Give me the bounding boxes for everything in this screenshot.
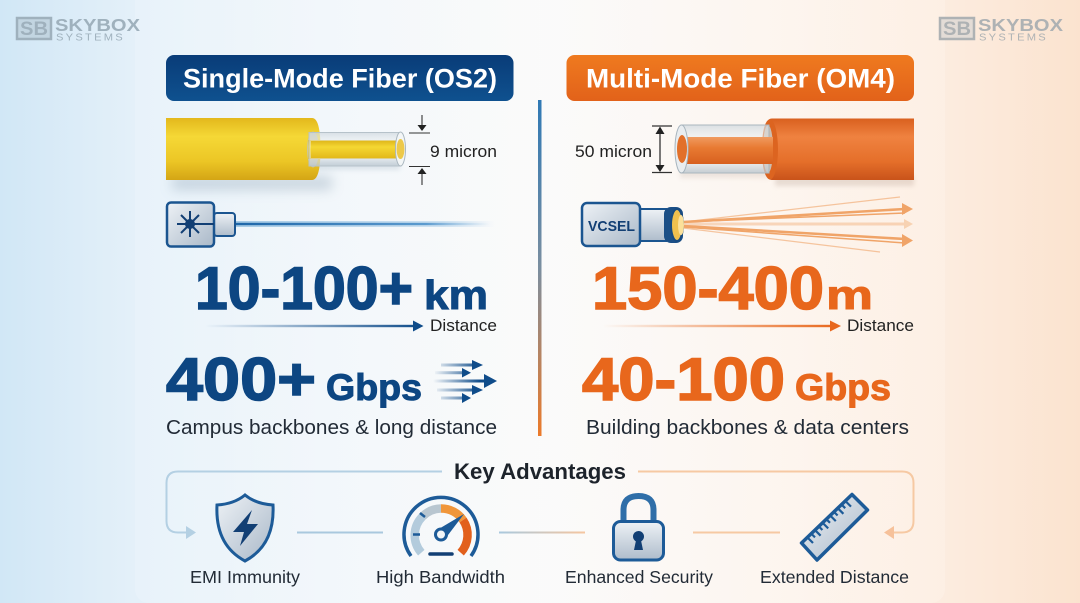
dimension: 50 micron: 50 micron [575,143,652,161]
stat: distance 150-400 m: Distance [847,317,914,335]
dimension: 50 micron [575,126,672,172]
stat: distance 10-100+ km: Distance [430,317,497,335]
text: single-mode use case: Campus backbones & long distance [166,417,497,439]
icon: orange fiber cable [675,118,914,186]
heading: key advantages: Key Advantages [454,459,626,484]
panel: key advantages [166,459,914,587]
arrow: distance [205,320,424,332]
arrow: right loop [638,472,914,539]
panel: multi-mode fiber [566,55,914,439]
heading: multi-mode: Multi-Mode Fiber (OM4) [586,64,895,94]
icon: VCSEL source with beams: VCSEL [588,218,635,235]
heading: single-mode [166,55,514,101]
stat: bandwidth 400+ Gbps: Gbps [326,367,422,408]
stat: bandwidth 40-100 Gbps: Gbps [795,367,891,408]
icon: gauge [404,497,478,556]
logo: Skybox Systems right: SKYBOX [978,15,1063,35]
arrow: distance orange [603,320,841,332]
icon: VCSEL source with beams [582,197,913,252]
text: multi-mode use case: Building backbones & data centers [586,417,909,439]
stat: distance 150-400 m: 150-400 [592,255,824,322]
label: high bandwidth: High Bandwidth [376,567,505,587]
dimension: 9 micron: 9 micron [430,143,497,161]
stat: bandwidth 400+ Gbps [166,346,422,413]
logo: Skybox Systems right [940,15,1063,44]
label: EMI immunity: EMI Immunity [190,567,300,587]
logo: Skybox Systems right: SB [943,19,971,40]
stat: distance 150-400 m [592,255,914,335]
stat: distance 10-100+ km [195,255,497,335]
stat: bandwidth 40-100 Gbps: 40-100 [582,346,785,413]
logo: Skybox Systems right: SYSTEMS [979,32,1048,44]
arrow: left loop [166,472,442,539]
icon: ruler [802,494,868,560]
logo: Skybox Systems left: SKYBOX [55,15,140,35]
stat: distance 10-100+ km: km [424,272,488,318]
heading: multi-mode [566,55,914,101]
icon: speed arrows [433,360,497,403]
stat: distance 150-400 m: m [826,272,873,318]
divider [538,100,542,436]
dimension: 9 micron [409,115,497,185]
icon: padlock [614,496,664,560]
label: extended distance: Extended Distance [760,567,909,587]
logo: Skybox Systems left: SYSTEMS [56,32,125,44]
logo: Skybox Systems left: SB [20,19,48,40]
icon: yellow fiber cable [166,118,406,190]
panel: single-mode fiber [166,55,514,439]
icon: shield [217,495,273,561]
heading: single-mode: Single-Mode Fiber (OS2) [183,64,497,94]
stat: distance 10-100+ km: 10-100+ [195,255,413,322]
label: enhanced security: Enhanced Security [565,567,713,587]
icon: laser source with beam [167,202,495,246]
stat: bandwidth 40-100 Gbps [582,346,891,413]
logo: Skybox Systems left [17,15,140,44]
stat: bandwidth 400+ Gbps: 400+ [166,346,316,413]
